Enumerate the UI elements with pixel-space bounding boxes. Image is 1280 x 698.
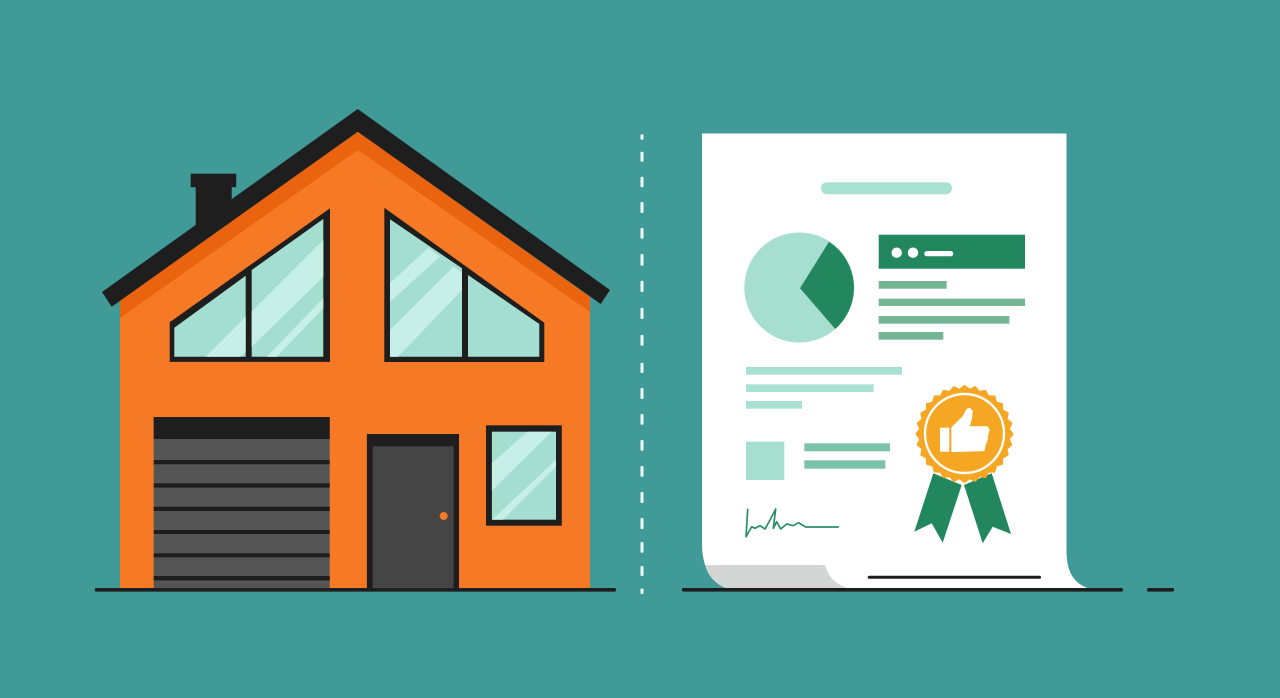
icon: chimney xyxy=(191,174,236,240)
text lines below chart xyxy=(746,367,902,409)
report document xyxy=(702,134,1090,589)
signature xyxy=(746,509,838,537)
ground line dash xyxy=(1147,588,1174,592)
approval badge xyxy=(914,386,1012,543)
front door xyxy=(367,434,459,590)
seal ring xyxy=(925,394,1004,473)
house wall xyxy=(120,132,590,590)
right attic window xyxy=(384,208,544,362)
gold seal xyxy=(916,386,1012,482)
ribbon tails xyxy=(914,473,1011,543)
left attic window xyxy=(170,208,330,362)
paper sheet xyxy=(702,134,1090,589)
signature baseline xyxy=(868,576,1041,579)
small window xyxy=(486,425,562,526)
house illustration xyxy=(95,109,616,592)
ground line under house xyxy=(95,588,616,592)
page curl shadow xyxy=(705,565,850,589)
document title bar xyxy=(821,182,952,194)
green header block xyxy=(879,235,1025,269)
caption lines xyxy=(804,443,890,469)
icon: thumbs up xyxy=(940,408,989,452)
ground line under document xyxy=(682,588,1123,592)
roof xyxy=(102,109,610,307)
pie chart xyxy=(744,232,854,342)
image placeholder square xyxy=(746,442,784,480)
dashed divider xyxy=(640,134,644,594)
garage door xyxy=(154,417,330,590)
roof underside shadow xyxy=(120,132,590,318)
text lines beside chart xyxy=(879,281,1025,340)
